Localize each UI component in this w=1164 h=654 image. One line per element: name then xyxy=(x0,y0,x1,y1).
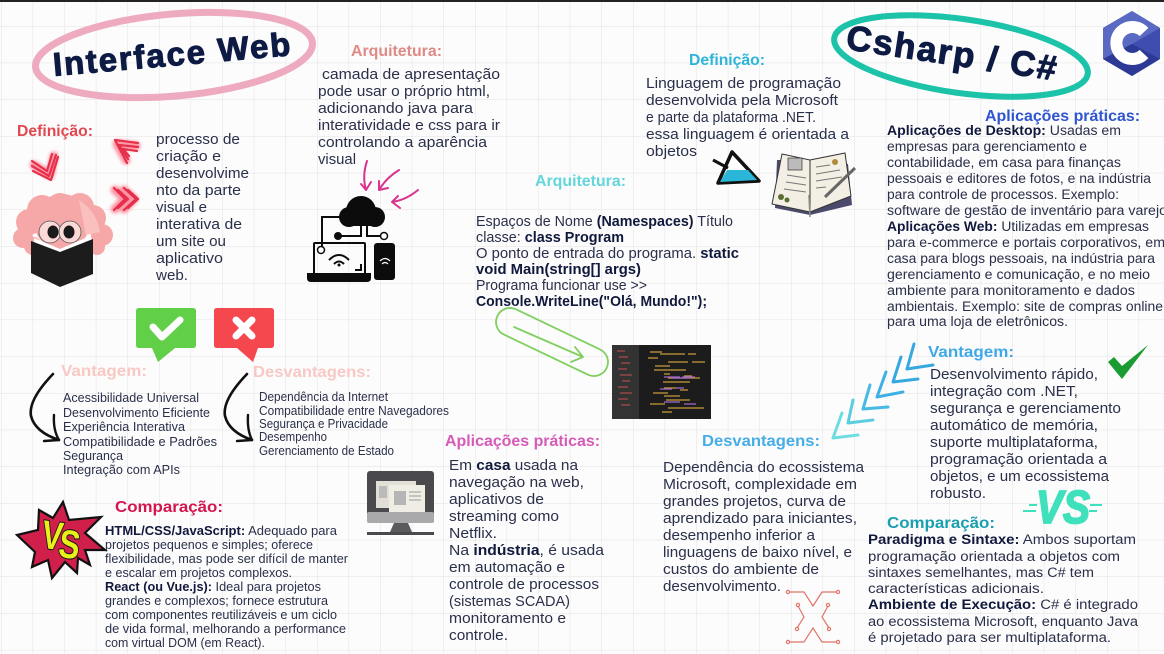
text: definição C#: objetos xyxy=(646,143,697,160)
text: comparação web: flexibilidade, mas pode ser difícil de manter xyxy=(105,552,348,566)
text: arquitetura web: camada de apresentação xyxy=(322,66,500,83)
text: comparação web xyxy=(105,524,348,650)
text: comparação web: React (ou Vue.js): Ideal para projetos xyxy=(105,580,321,594)
text: aplicações práticas web: controle de processos xyxy=(449,576,599,593)
text: definição web: aplicativo xyxy=(156,250,223,267)
icon: VS starburst xyxy=(17,502,105,578)
text: aplicações práticas C#: gerenciamento e comunicação, e no meio xyxy=(887,267,1150,282)
heading: Vantagem (C#): Vantagem: xyxy=(928,344,1014,361)
text: aplicações práticas web: (sistemas SCADA) xyxy=(449,593,570,610)
text: aplicações práticas web: Em casa usada na xyxy=(449,457,579,474)
text: aplicações práticas web: navegação na web, xyxy=(449,474,584,491)
text: lista vantagens web: Acessibilidade Universal xyxy=(63,391,199,405)
text: definição web: criação e xyxy=(156,148,221,165)
text: definição C#: desenvolvida pela Microsoft xyxy=(646,92,839,109)
text: desvantagens C#: Microsoft, complexidade em xyxy=(663,476,857,493)
text: arquitetura web: interatividade e css para ir xyxy=(318,117,500,134)
text: aplicações práticas C#: para e-commerce e portais corporativos, em xyxy=(887,235,1164,250)
heading: Vantagem (web): Vantagem: xyxy=(61,363,147,380)
text: arquitetura C#: classe: class Program xyxy=(476,229,624,246)
icon: pink arrows xyxy=(361,161,418,208)
text: definição web: nto da parte xyxy=(156,182,241,199)
text: definição web: desenvolvime xyxy=(156,165,249,182)
heading: Comparação (C#): Comparação: xyxy=(887,515,995,532)
title: Interface Web: Interface Web xyxy=(51,25,292,83)
text: desvantagens C#: aprendizado para iniciantes, xyxy=(663,510,857,527)
heading: Definição (web): Definição: xyxy=(17,123,93,140)
icon: cloud network devices xyxy=(307,196,395,282)
text: aplicações práticas web: controle. xyxy=(449,627,508,644)
text: arquitetura web: pode usar o próprio html, xyxy=(318,83,490,100)
heading: Desvantagens (web): Desvantagens: xyxy=(253,364,371,381)
icon: green check xyxy=(1108,345,1148,379)
icon: triangle flask xyxy=(713,152,759,183)
text: definição C#: essa linguagem é orientada a xyxy=(646,126,850,143)
text: comparação C#: Ambiente de Execução: C# é integrado xyxy=(868,597,1138,612)
text: comparação C#: sintaxes semelhantes, mas C# tem xyxy=(868,565,1094,580)
text: aplicações práticas C#: Aplicações de Desktop: Usadas em xyxy=(887,123,1121,138)
text: desvantagens C#: desenvolvimento. xyxy=(663,578,781,595)
text: aplicações práticas C# xyxy=(887,123,1164,329)
text: definição web xyxy=(155,131,249,284)
text: aplicações práticas web: em automação e xyxy=(449,559,565,576)
heading: Comparação (web): Comparação: xyxy=(115,499,223,516)
text: arquitetura C#: Programa funcionar use >> xyxy=(476,277,647,294)
icon: curved arrow vantagem xyxy=(31,374,59,441)
text: arquitetura C#: Console.WriteLine("Olá, Mundo!"); xyxy=(476,293,707,310)
text: comparação web: e escalar em projetos complexos. xyxy=(105,566,292,580)
text: vantagem C#: objetos, e um ecossistema xyxy=(930,468,1110,485)
icon: VS starburst: S xyxy=(56,522,83,568)
text: arquitetura C#: Espaços de Nome (Namespaces) Título xyxy=(476,213,733,230)
text: comparação web: com virtual DOM (em React). xyxy=(105,636,265,650)
text: comparação web: com componentes reutilizáveis e um ciclo xyxy=(105,608,337,622)
text: vantagem C#: suporte multiplataforma, xyxy=(930,434,1098,451)
text: aplicações práticas C#: Aplicações Web: Utilizadas em empresas xyxy=(887,219,1149,234)
text: definição web: visual e xyxy=(156,199,207,216)
text: comparação C#: programação orientada a objetos com xyxy=(868,549,1120,564)
text: vantagem C# xyxy=(930,366,1121,502)
text: vantagem C#: Desenvolvimento rápido, xyxy=(930,366,1098,383)
text: lista desvantagens web: Compatibilidade entre Navegadores xyxy=(259,404,449,418)
text: definição web: processo de xyxy=(156,131,240,148)
text: aplicações práticas C#: para controle de processos. Exemplo: xyxy=(887,187,1119,202)
icon: teal VS: VS xyxy=(1036,481,1090,533)
text: vantagem C#: programação orientada a xyxy=(930,451,1108,468)
heading: Aplicações práticas (web): Aplicações práticas: xyxy=(445,433,600,450)
text: comparação C#: é projetado para ser multiplataforma. xyxy=(868,630,1111,645)
heading: Aplicações práticas (C#): Aplicações práticas: xyxy=(985,108,1140,125)
text: vantagem C#: integração com .NET, xyxy=(930,383,1078,400)
icon: VS starburst: V xyxy=(39,513,66,559)
text: lista desvantagens web: Dependência da Internet xyxy=(259,390,388,404)
text: comparação web: de vida formal, melhorando a performance xyxy=(105,622,346,636)
icon: curved arrow desvantagens xyxy=(225,374,252,441)
text: aplicações práticas C#: ambientais. Exemplo: site de compras online xyxy=(887,299,1163,314)
text: lista desvantagens web xyxy=(259,390,449,458)
text: aplicações práticas C#: software de gestão de inventário para varejo xyxy=(887,203,1164,218)
text: arquitetura C#: void Main(string[] args) xyxy=(476,261,641,278)
heading: Desvantagens (C#): Desvantagens: xyxy=(702,433,820,450)
text: desvantagens C#: custos do ambiente de xyxy=(663,561,819,578)
icon: circuit X xyxy=(786,590,840,644)
text: vantagem C#: segurança e gerenciamento xyxy=(930,400,1121,417)
text: definição C# xyxy=(646,75,850,160)
text: lista desvantagens web: Segurança e Privacidade xyxy=(259,417,388,431)
text: comparação web: projetos pequenos e simples; oferece xyxy=(105,538,313,552)
icon: blue chevron arrows xyxy=(833,344,933,438)
text: definição web: um site ou xyxy=(156,233,226,250)
text: definição web: interativa de xyxy=(156,216,242,233)
icon: code editor screenshot xyxy=(612,345,711,419)
text: comparação C#: características adicionais. xyxy=(868,581,1044,596)
text: comparação web: grandes e complexos; fornece estrutura xyxy=(105,594,328,608)
text: desvantagens C#: grandes projetos, curva de xyxy=(663,493,846,510)
icon: red x bubble xyxy=(214,308,274,362)
icon: desktop monitor xyxy=(367,471,434,535)
title: Interface Web xyxy=(32,2,316,108)
icon: C logo hexagon xyxy=(1103,11,1160,76)
text: comparação C#: Paradigma e Sintaxe: Ambos suportam xyxy=(868,532,1136,547)
text: comparação C#: ao ecossistema Microsoft, enquanto Java xyxy=(868,614,1139,629)
text: aplicações práticas web: streaming como xyxy=(449,508,559,525)
text: aplicações práticas web: monitoramento e xyxy=(449,610,566,627)
text: arquitetura web: controlando a aparência xyxy=(318,134,488,151)
icon: neon arrows xyxy=(32,140,138,210)
icon: open notebook with pen xyxy=(772,153,855,217)
text: aplicações práticas web: aplicativos de xyxy=(449,491,544,508)
text: desvantagens C#: Dependência do ecossistema xyxy=(663,459,865,476)
text: lista vantagens web: Segurança xyxy=(63,449,123,463)
icon: green check bubble xyxy=(136,308,196,362)
text: lista vantagens web: Compatibilidade e Padrões xyxy=(63,435,217,449)
text: comparação C# xyxy=(868,532,1139,645)
text: arquitetura web: adicionando java para xyxy=(318,100,474,117)
text: aplicações práticas C#: pessoais e editores de fotos, e na indústria xyxy=(887,171,1151,186)
text: comparação web: HTML/CSS/JavaScript: Adequado para xyxy=(105,524,337,538)
text: aplicações práticas web: Na indústria, é usada xyxy=(449,542,605,559)
title: Csharp / C# xyxy=(829,2,1093,110)
heading: Arquitetura (C#): Arquitetura: xyxy=(535,173,626,190)
text: aplicações práticas C#: ambiente para monitoramento e dados xyxy=(887,283,1135,298)
text: vantagem C#: robusto. xyxy=(930,485,986,502)
text: arquitetura web: visual xyxy=(318,151,356,168)
text: definição C#: Linguagem de programação xyxy=(646,75,841,92)
text: aplicações práticas web xyxy=(449,457,605,644)
text: desvantagens C#: desempenho inferior a xyxy=(663,527,816,544)
text: aplicações práticas web: Netflix. xyxy=(449,525,497,542)
text: aplicações práticas C#: casa para blogs pessoais, na indústria para xyxy=(887,251,1155,266)
text: aplicações práticas C#: para uma loja de eletrônicos. xyxy=(887,314,1068,329)
text: desvantagens C# xyxy=(663,459,865,595)
text: aplicações práticas C#: contabilidade, em casa para finanças xyxy=(887,155,1121,170)
text: vantagem C#: automático de memória, xyxy=(930,417,1098,434)
text: arquitetura C#: O ponto de entrada do programa. static xyxy=(476,245,739,262)
icon: brain mascot reading a book xyxy=(13,193,113,287)
heading: Definição (C#): Definição: xyxy=(689,52,765,69)
text: aplicações práticas C#: empresas para gerenciamento e xyxy=(887,139,1087,154)
text: lista desvantagens web: Gerenciamento de Estado xyxy=(259,444,394,458)
heading: Arquitetura (web): Arquitetura: xyxy=(351,43,442,60)
text: lista vantagens web: Desenvolvimento Eficiente xyxy=(63,406,210,420)
text: lista vantagens web: Integração com APIs xyxy=(63,463,180,477)
text: definição C#: e parte da plataforma .NET. xyxy=(646,109,816,126)
text: definição web: web. xyxy=(155,267,188,284)
icon: green paperclip arrow xyxy=(491,303,613,381)
text: lista vantagens web xyxy=(63,391,217,477)
text: lista vantagens web: Experiência Interativa xyxy=(63,420,185,434)
text: lista desvantagens web: Desempenho xyxy=(259,430,327,444)
text: arquitetura C# xyxy=(476,213,739,310)
text: desvantagens C#: linguagens de baixo nível, e xyxy=(663,544,852,561)
text: arquitetura web xyxy=(318,66,500,168)
title: Csharp / C#: Csharp / C# xyxy=(844,18,1059,88)
